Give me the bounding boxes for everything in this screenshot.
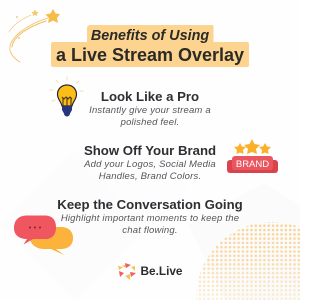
title	[56, 28, 244, 65]
text block: Show Off Your Brand: Show Off Your Brand	[84, 143, 216, 158]
icon: shooting stars	[8, 9, 60, 62]
logo: Be.Live	[118, 263, 182, 280]
icon: brand badge with stars	[227, 139, 278, 173]
text block: Show Off Your Brand	[84, 143, 216, 182]
text block: Show Off Your Brand: Handles, Brand Colors.	[99, 170, 201, 182]
icon: light bulb	[50, 76, 84, 116]
dotted semicircle	[196, 222, 300, 300]
text block: Show Off Your Brand: Add your Logos, Social Media	[84, 159, 216, 170]
text block: Keep the Conversation Going: Keep the Conversation Going	[57, 197, 243, 212]
icon: brand badge with stars: BRAND	[236, 159, 269, 170]
title: Benefits of Using	[91, 28, 209, 44]
text block: Look Like a Pro: polished feel.	[121, 116, 179, 128]
icon: logo mark	[118, 263, 136, 280]
heading highlight	[51, 25, 249, 67]
text block: Keep the Conversation Going: chat flowing.	[122, 224, 178, 236]
text block: Keep the Conversation Going: Highlight important moments to keep the	[61, 213, 239, 224]
title: a Live Stream Overlay	[56, 45, 244, 65]
text block: Keep the Conversation Going	[57, 197, 243, 236]
icon: chat bubbles	[14, 216, 73, 255]
text block: Look Like a Pro	[89, 89, 211, 128]
text block: Look Like a Pro: Instantly give your stream a	[89, 105, 211, 116]
logo wordmark: Be.Live	[140, 264, 182, 278]
text block: Look Like a Pro: Look Like a Pro	[101, 89, 199, 104]
